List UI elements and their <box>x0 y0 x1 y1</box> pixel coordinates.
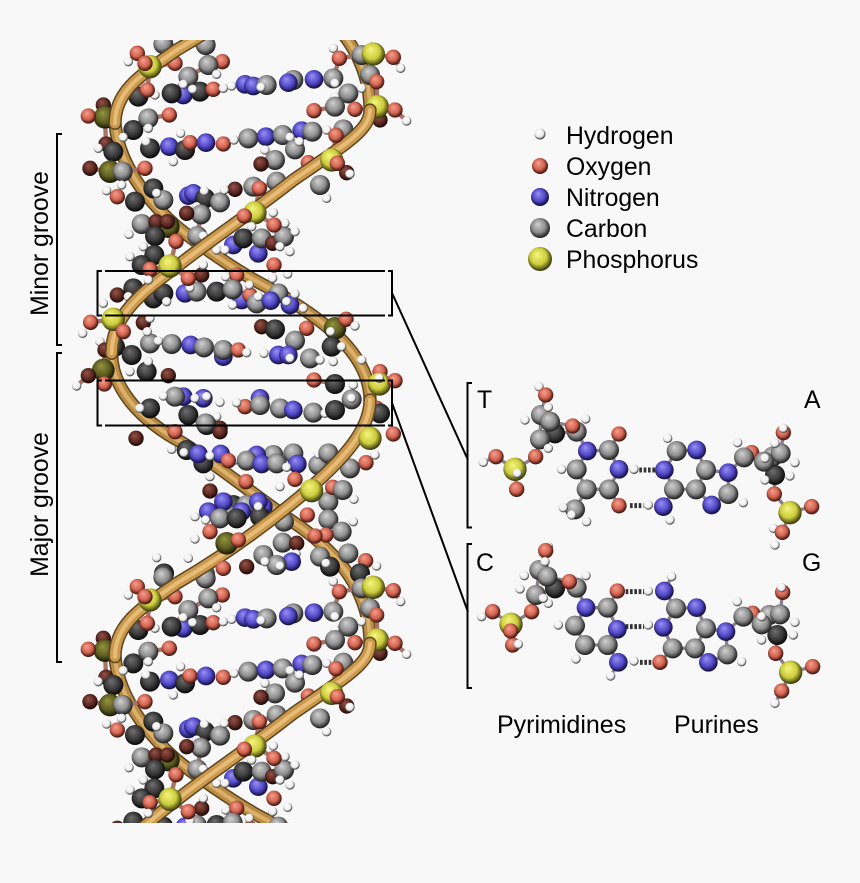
bracket: T-A pair <box>468 383 472 528</box>
legend: nitrogen: Nitrogen <box>566 185 660 212</box>
label: minor groove: Minor groove <box>27 171 54 316</box>
atoms <box>477 542 820 708</box>
label: A: A <box>804 387 821 414</box>
connector line to T-A <box>392 293 468 460</box>
legend: hydrogen: Hydrogen <box>566 123 674 150</box>
C-G base pair molecule <box>477 542 820 708</box>
back ribbon strands <box>112 0 370 832</box>
connector line to C-G <box>392 403 468 612</box>
legend: carbon <box>530 216 647 243</box>
label: T: T <box>477 387 492 414</box>
label: major groove: Major groove <box>27 432 54 577</box>
legend: oxygen: Oxygen <box>566 154 651 181</box>
legend <box>528 123 698 274</box>
atoms <box>479 382 819 550</box>
selection box: T-A base pair <box>98 271 392 316</box>
label: purines: Purines <box>674 711 759 739</box>
bracket: C-G pair <box>468 544 472 688</box>
legend: phosphorus: Phosphorus <box>566 247 698 274</box>
selection box: C-G base pair <box>98 380 392 426</box>
front phosphate groups <box>78 55 401 873</box>
label: pyrimidines: Pyrimidines <box>497 711 626 739</box>
label: C: C <box>476 550 494 577</box>
bracket: major groove <box>57 353 62 662</box>
bonds <box>482 551 813 703</box>
hydrogen bonds <box>626 592 653 662</box>
bracket: minor groove <box>57 134 62 345</box>
atoms of the helix <box>72 34 411 874</box>
front ribbon strands <box>112 0 370 843</box>
T-A base pair molecule <box>479 382 819 550</box>
bonds <box>483 395 812 532</box>
legend: carbon: Carbon <box>566 216 647 243</box>
hydrogen bonds <box>630 470 657 506</box>
label: G: G <box>802 550 821 577</box>
DNA double helix with atoms <box>72 40 412 823</box>
